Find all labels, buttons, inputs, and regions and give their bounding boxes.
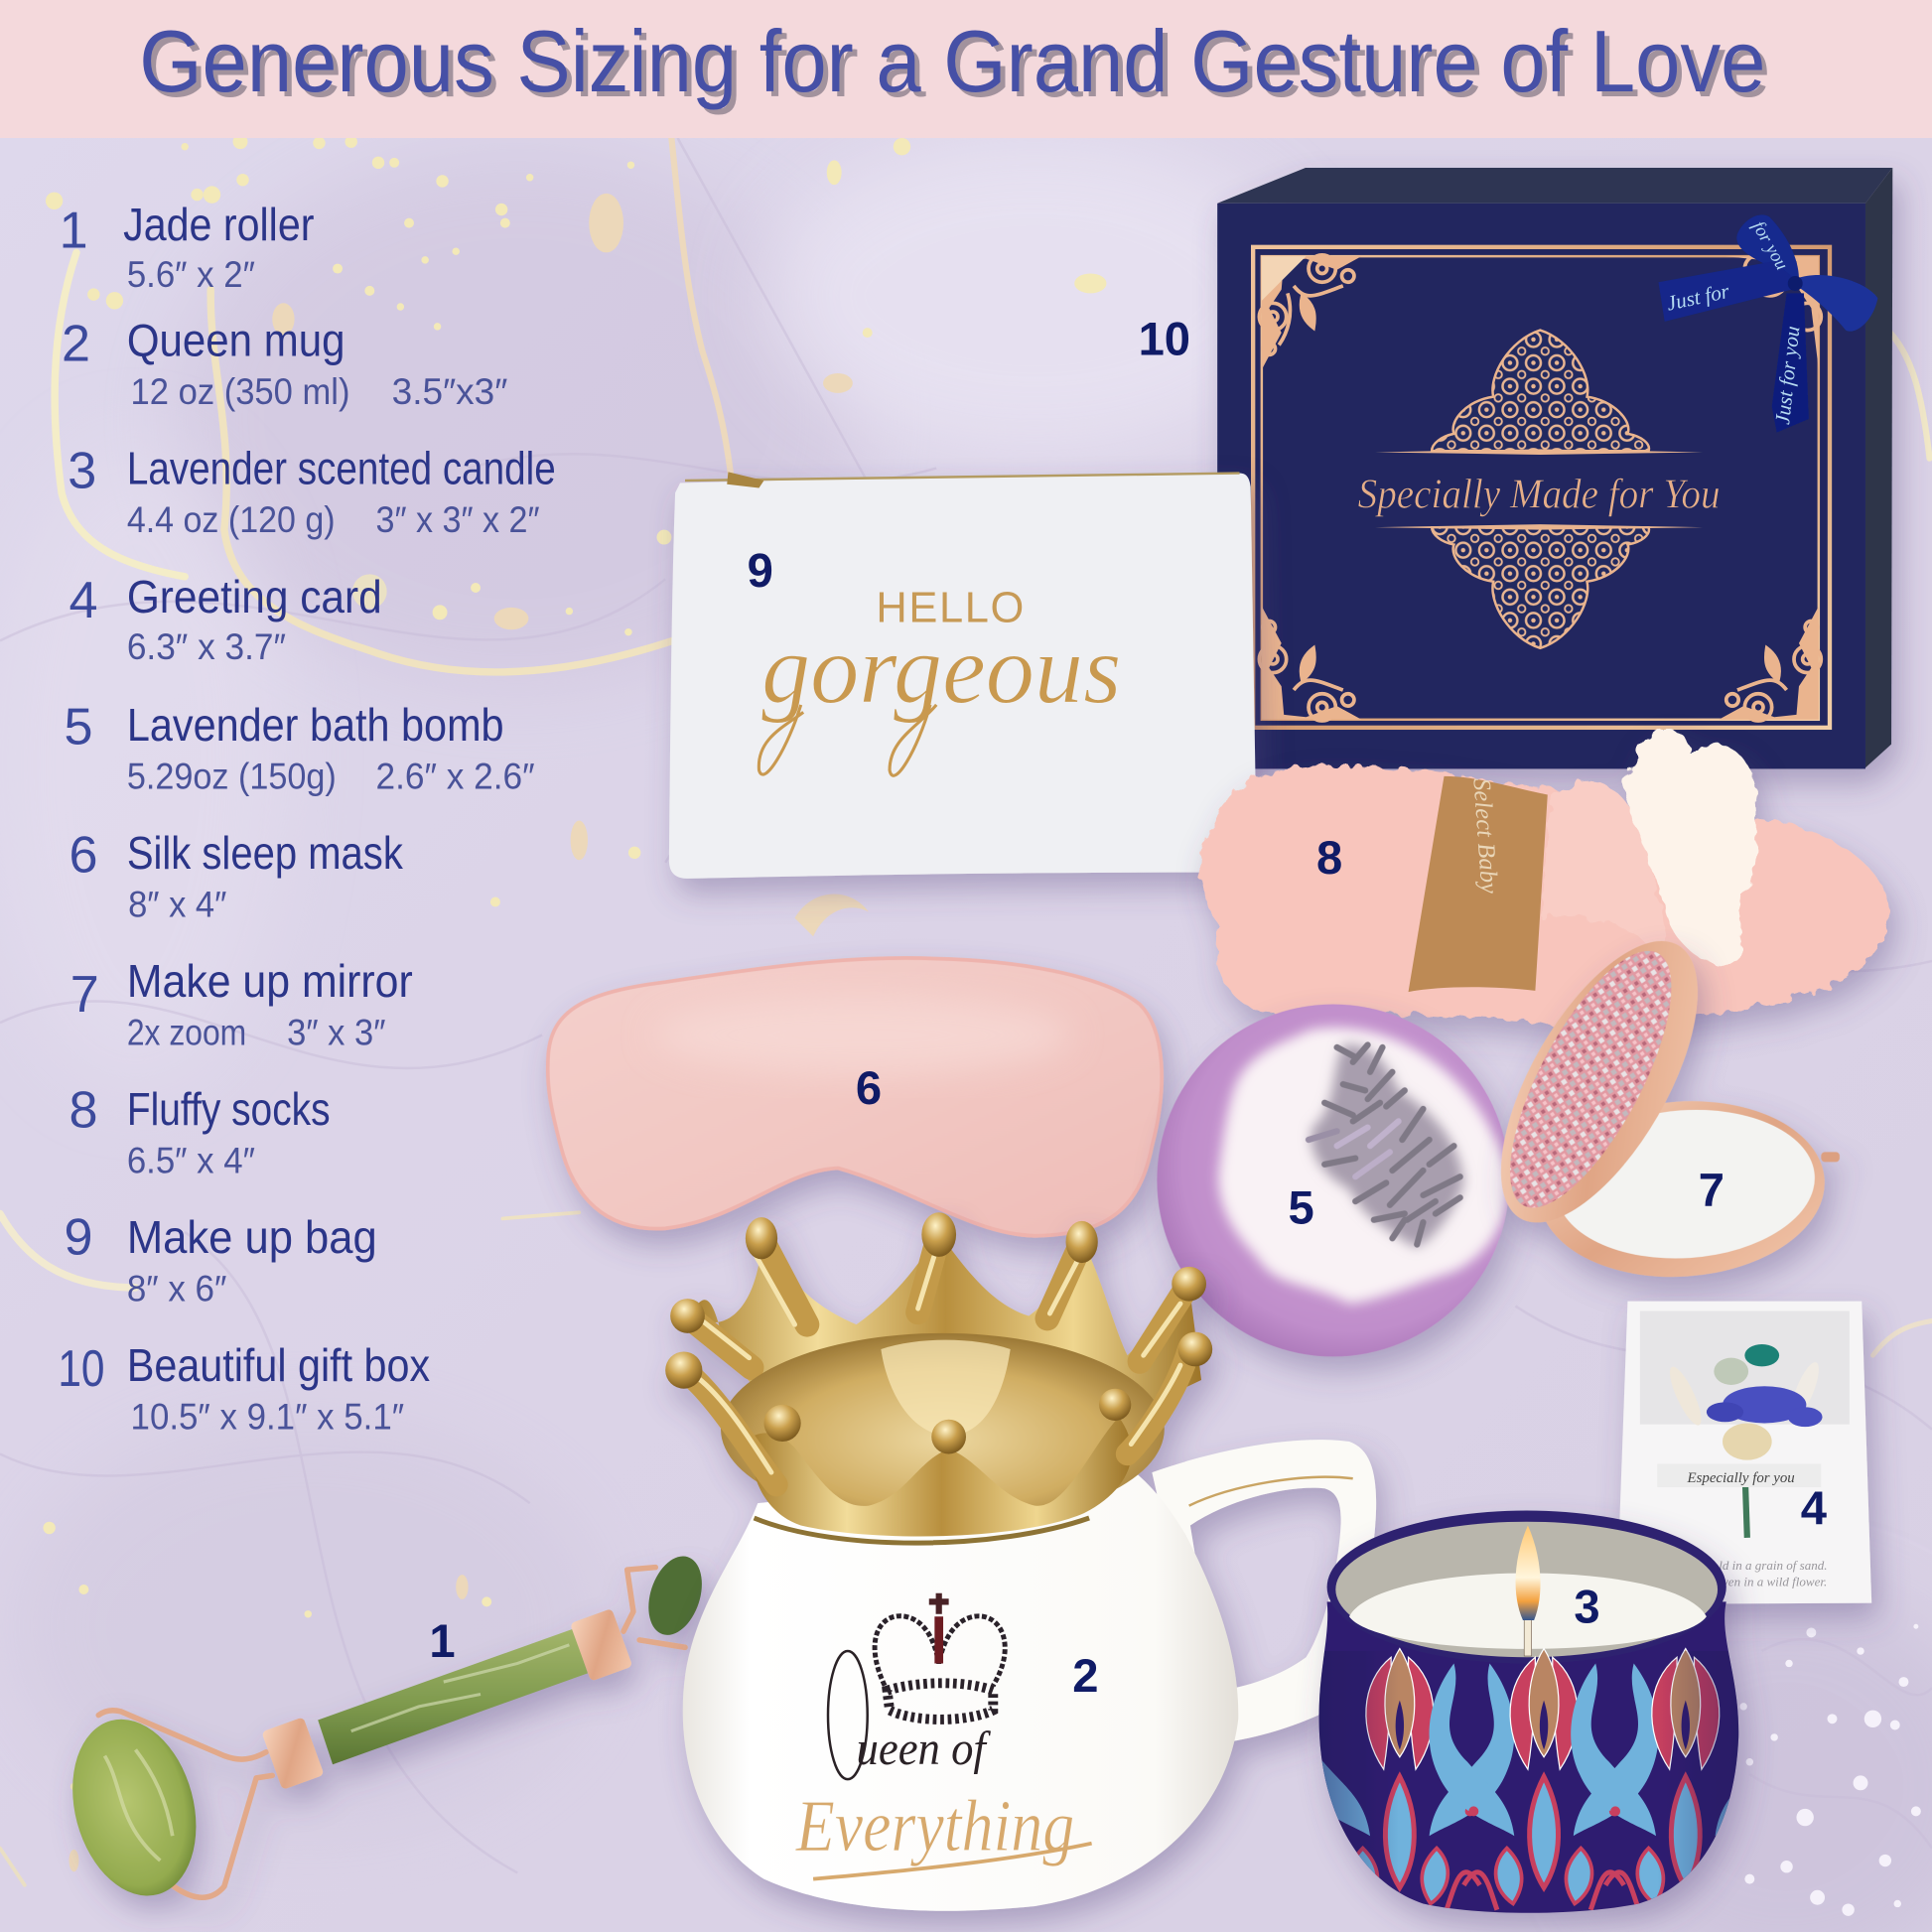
small roller [639, 1550, 711, 1642]
title: Generous Sizing for a Grand Gesture of Love [144, 17, 1770, 115]
list item 6 [69, 827, 404, 924]
list item 6: Silk sleep mask [127, 827, 404, 879]
box front [1217, 204, 1865, 768]
list item 2: 2 [62, 316, 90, 373]
list item 2: 12 oz (350 ml) [131, 370, 349, 412]
ribbon bow: Just for you [1770, 325, 1804, 426]
card caption [1657, 1463, 1821, 1487]
Everything text: Everything [795, 1786, 1074, 1867]
tin body [1319, 1601, 1738, 1913]
photo number labels: 9 [748, 544, 773, 597]
list item 7: 2x zoom [127, 1011, 246, 1052]
roller frame [98, 1568, 685, 1897]
gorgeous script [759, 616, 1121, 775]
kraft band: Select Baby [1467, 777, 1502, 896]
prong highlights [702, 1257, 1180, 1358]
item list [58, 199, 556, 1438]
crown front [665, 1332, 1212, 1536]
queen mug [665, 1212, 1376, 1911]
card verse: ld in a grain of sand. [1719, 1558, 1827, 1573]
list item 5: 5.29oz (150g) [127, 755, 337, 796]
ribbon bow [1658, 214, 1877, 433]
card verse: ven in a wild flower. [1723, 1574, 1827, 1588]
header band [0, 0, 1932, 138]
title: Generous Sizing for a Grand Gesture of Love [139, 12, 1765, 110]
list item 5: 5 [65, 699, 93, 757]
gorgeous script: gorgeous [761, 616, 1121, 724]
center ornament bottom [1432, 527, 1649, 648]
list item 4: 4 [69, 572, 97, 629]
Queen of text [828, 1651, 991, 1779]
list item 1: 5.6″ x 2″ [127, 253, 255, 295]
scented candle [1311, 1511, 1760, 1932]
gift box [1217, 168, 1892, 768]
tin rim [1327, 1511, 1726, 1663]
list item 2: Queen mug [127, 315, 345, 366]
list item 10: 10 [58, 1340, 104, 1398]
big roller [54, 1706, 214, 1910]
candle wick [1524, 1614, 1532, 1656]
list item 1: Jade roller [123, 199, 314, 250]
crown back [670, 1212, 1206, 1442]
list item 8: 6.5″ x 4″ [127, 1139, 255, 1180]
card caption: Especially for you [1687, 1470, 1795, 1486]
gold handle line [1189, 1477, 1353, 1506]
dried lavender [1309, 1044, 1460, 1244]
tin pattern [1318, 1647, 1739, 1910]
mirror hinge [1821, 1152, 1840, 1162]
ribbon bow: for you [1747, 217, 1792, 274]
make up bag [669, 472, 1257, 879]
box script text: Specially Made for You [1358, 471, 1721, 517]
crown bowl [721, 1333, 1165, 1525]
list item 3 [68, 442, 556, 540]
list item 5 [65, 699, 535, 796]
sock body [1200, 765, 1889, 1026]
mug handle [1152, 1440, 1376, 1744]
box side [1865, 168, 1892, 767]
corner ornaments [1259, 255, 1821, 721]
white splatter dots [1739, 1624, 1921, 1916]
sock cuff [1624, 730, 1756, 966]
photo number labels: 2 [1072, 1649, 1099, 1702]
greeting card [1616, 1302, 1871, 1604]
list item 7: 3″ x 3″ [287, 1011, 385, 1052]
list item 4 [69, 571, 382, 667]
crown prongs back [688, 1235, 1189, 1368]
rose gold collars [261, 1608, 632, 1790]
mask sheen [653, 996, 1072, 1074]
list item 2 [62, 315, 507, 412]
list item 5: 2.6″ x 2.6″ [376, 755, 535, 796]
wax [1349, 1574, 1707, 1649]
list item 9: 8″ x 6″ [127, 1268, 226, 1310]
mirror base [1533, 1092, 1831, 1287]
flower bouquet [1664, 1344, 1824, 1538]
fluffy socks [1200, 730, 1889, 1026]
list item 3: Lavender scented candle [127, 443, 556, 494]
list item 9: 9 [65, 1208, 93, 1266]
bag body [669, 474, 1257, 879]
handle [318, 1629, 588, 1764]
list item 7: Make up mirror [127, 955, 413, 1007]
jewelled lid [1479, 929, 1703, 1229]
photo number labels: 6 [856, 1061, 882, 1114]
mug body [683, 1466, 1238, 1911]
photo number labels: 5 [1288, 1180, 1314, 1233]
jade roller [54, 1550, 711, 1910]
photo number labels: 8 [1316, 831, 1342, 884]
list item 4: 6.3″ x 3.7″ [127, 625, 286, 667]
list item 8: Fluffy socks [127, 1083, 331, 1135]
photo number labels: 1 [429, 1614, 456, 1667]
list item 6: 8″ x 4″ [128, 883, 226, 924]
crown tips back [670, 1212, 1206, 1333]
list item 6: 6 [69, 827, 97, 885]
lid [1461, 911, 1736, 1252]
gold frame [1253, 247, 1830, 728]
ribbon bow: Just for [1664, 279, 1732, 316]
list item 7 [70, 955, 413, 1052]
compact mirror [1461, 911, 1840, 1287]
list item 5: Lavender bath bomb [127, 699, 504, 751]
candle flame [1516, 1525, 1541, 1620]
list item 9: Make up bag [127, 1211, 377, 1263]
photo number labels: 10 [1139, 312, 1190, 364]
zipper [685, 472, 1240, 487]
photo number labels [429, 312, 1827, 1702]
tin inner wall [1335, 1522, 1718, 1657]
crown bowl highlight [881, 1340, 1011, 1436]
list item 2: 3.5″x3″ [392, 370, 507, 412]
list item 4: Greeting card [127, 571, 382, 622]
list item 3: 3″ x 3″ x 2″ [376, 498, 540, 540]
photo number labels: 3 [1574, 1580, 1600, 1632]
list item 10: Beautiful gift box [127, 1339, 430, 1391]
list item 1: 1 [60, 202, 88, 259]
list item 9 [65, 1208, 377, 1310]
HELLO: HELLO [876, 585, 1024, 632]
list item 7: 7 [70, 966, 99, 1024]
box top [1217, 168, 1892, 204]
list item 8: 8 [69, 1082, 97, 1140]
list item 10: 10.5″ x 9.1″ x 5.1″ [131, 1396, 404, 1438]
photo number labels: 7 [1699, 1164, 1725, 1216]
Queen of text: ueen of [857, 1724, 991, 1775]
sleep mask [548, 958, 1162, 1236]
lavender underlay [1311, 1044, 1463, 1247]
bath bomb [1157, 1004, 1509, 1356]
ornament rules [1375, 449, 1703, 530]
white bomb top [1218, 1028, 1509, 1304]
card verse [1719, 1558, 1827, 1588]
list item 1 [60, 199, 314, 295]
list item 3: 3 [68, 442, 96, 499]
printed royal crown [875, 1593, 1005, 1720]
crown tips front [665, 1332, 1212, 1453]
gold splatter dots [43, 134, 1106, 1871]
list item 3: 4.4 oz (120 g) [127, 498, 336, 540]
kraft band [1409, 776, 1548, 992]
list item 8 [69, 1082, 331, 1181]
photo number labels: 4 [1801, 1481, 1827, 1534]
sock fold [1540, 781, 1668, 964]
list item 10 [58, 1339, 430, 1438]
center ornament top [1432, 331, 1649, 451]
gold base rim [755, 1518, 1089, 1543]
